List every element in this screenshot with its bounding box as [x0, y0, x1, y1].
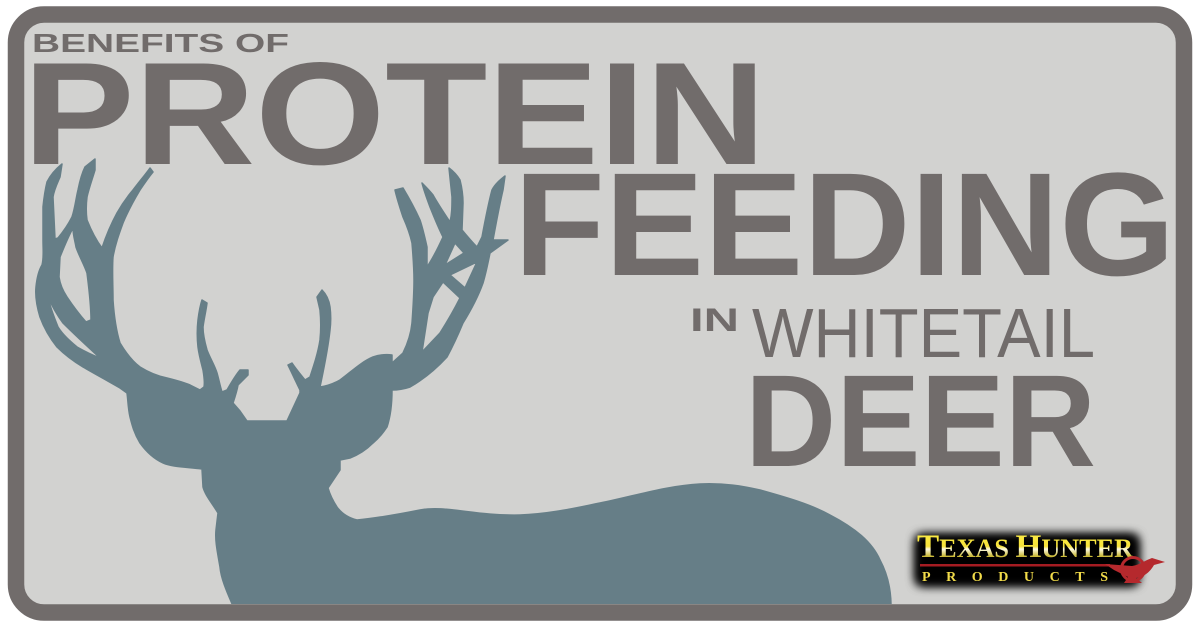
- heading: in: IN: [690, 302, 739, 338]
- heading: feeding: FEEDING: [514, 143, 1175, 307]
- heading: deer: DEER: [745, 347, 1096, 494]
- deer silhouette: [36, 159, 891, 606]
- heading: benefits of: BENEFITS OF: [32, 28, 289, 58]
- icon: roadrunner: [1105, 558, 1165, 583]
- logo: Texas Hunter Products: [916, 529, 1165, 585]
- logo products: PRODUCTS: [922, 570, 1108, 585]
- heading: protein: PROTEIN: [23, 32, 766, 195]
- heading: whitetail: WHITETAIL: [752, 294, 1095, 372]
- logo wordmark: TEXAS HUNTER: [917, 529, 1133, 565]
- title: [23, 28, 1175, 494]
- logo red rule: [920, 564, 1110, 566]
